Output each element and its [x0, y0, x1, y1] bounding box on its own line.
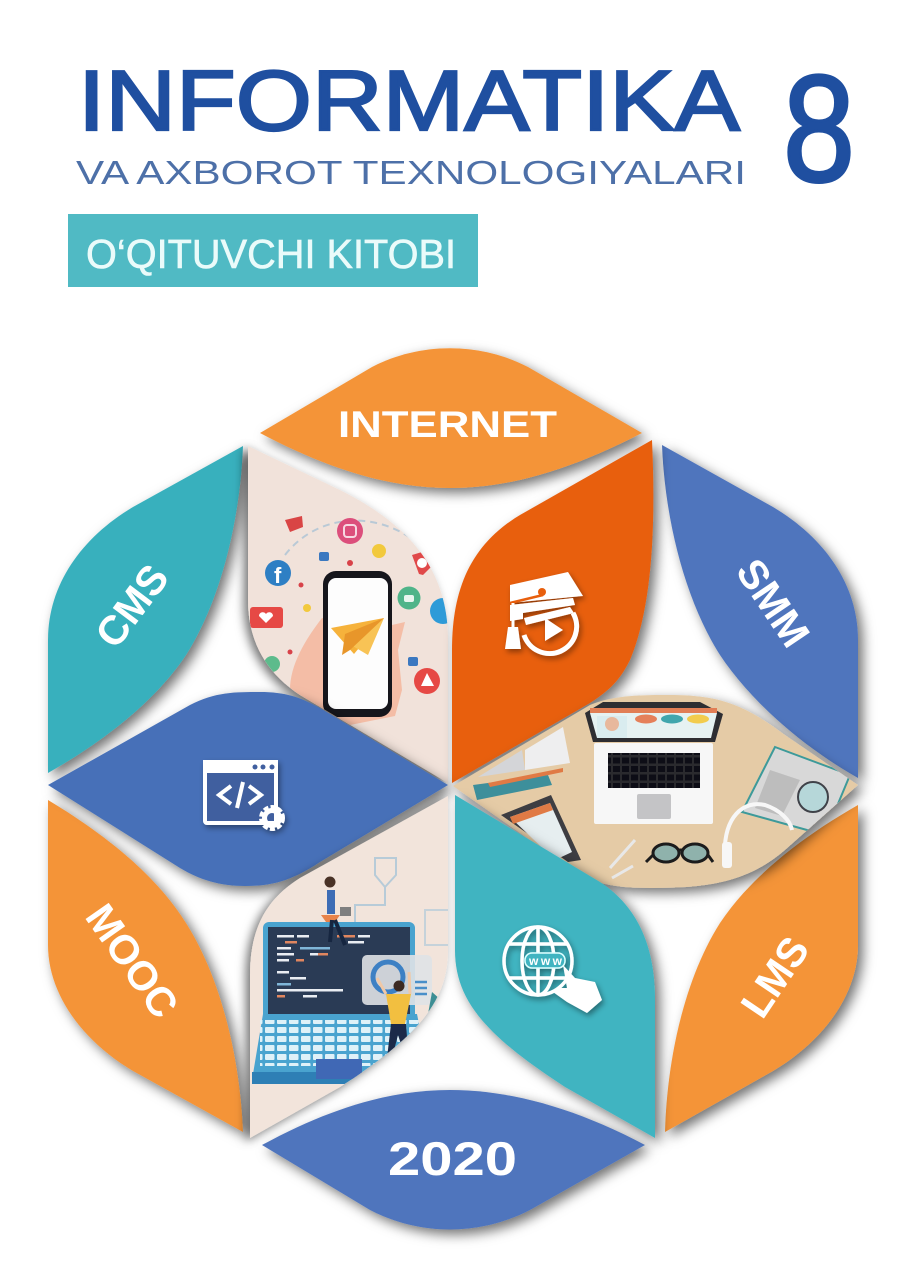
laptop [252, 922, 430, 1084]
panel: social media photo [240, 440, 456, 790]
panel: online learning icon petal [452, 440, 653, 783]
icon: small heart message [285, 516, 303, 532]
icon: play [414, 668, 440, 694]
icon: facebook: f [274, 563, 282, 588]
icon: code window [203, 760, 282, 828]
icon: globe with cursor: www [528, 954, 563, 968]
teacher book badge [68, 214, 478, 287]
panel: coding laptop photo [245, 790, 455, 1140]
notebooks [473, 727, 570, 800]
icon: twitter [430, 598, 448, 624]
icon: heart message left [250, 607, 283, 628]
title: INFORMATIKA [78, 54, 740, 149]
magnifier [798, 782, 828, 812]
panel: mooc: MOOC [77, 896, 187, 1026]
code lines [277, 935, 370, 998]
panel: internet [260, 348, 642, 488]
subtitle: VA AXBOROT TEXNOLOGIYALARI [76, 154, 746, 191]
panel: web petal [455, 795, 655, 1138]
hand [290, 618, 405, 725]
headphones [723, 802, 794, 843]
icon: graduation cap and play [505, 572, 583, 654]
panel: internet: INTERNET [338, 404, 557, 445]
panel: cms [48, 446, 243, 773]
icon: green thumb [398, 586, 420, 610]
teacher book badge: O‘QITUVCHI KITOBI [86, 231, 456, 277]
icon: heart message right [412, 552, 430, 575]
tablet [501, 795, 581, 862]
icon: globe with cursor [504, 927, 602, 1013]
panel: mooc [48, 800, 243, 1132]
icon: paper plane [331, 618, 384, 655]
panel: lms: LMS [732, 928, 818, 1026]
icon: phone [323, 571, 392, 717]
panel: cms: CMS [86, 556, 178, 656]
panel: smm: SMM [727, 550, 819, 656]
panel: smm [662, 445, 858, 778]
panel: lms [665, 805, 858, 1132]
figure: sitting woman [321, 876, 351, 945]
small plant [428, 992, 438, 1012]
icon: small thumbs [319, 552, 418, 666]
small dots [288, 560, 353, 654]
pen [610, 840, 635, 878]
icon: instagram [337, 518, 363, 544]
icon: yellow badge [372, 544, 386, 558]
panel: year 2020 [262, 1090, 645, 1230]
dashed arc [285, 521, 425, 555]
shield icon [375, 858, 396, 887]
panel: year 2020: 2020 [388, 1132, 517, 1185]
icon: facebook [265, 560, 291, 588]
grade number: 8 [783, 44, 855, 214]
figure: standing man [377, 972, 411, 1058]
chart card [362, 955, 432, 1005]
glasses [646, 844, 713, 862]
panel: laptop desk photo [450, 690, 865, 890]
magazine [742, 747, 850, 835]
panel: code petal [48, 692, 448, 886]
laptop [585, 702, 723, 824]
